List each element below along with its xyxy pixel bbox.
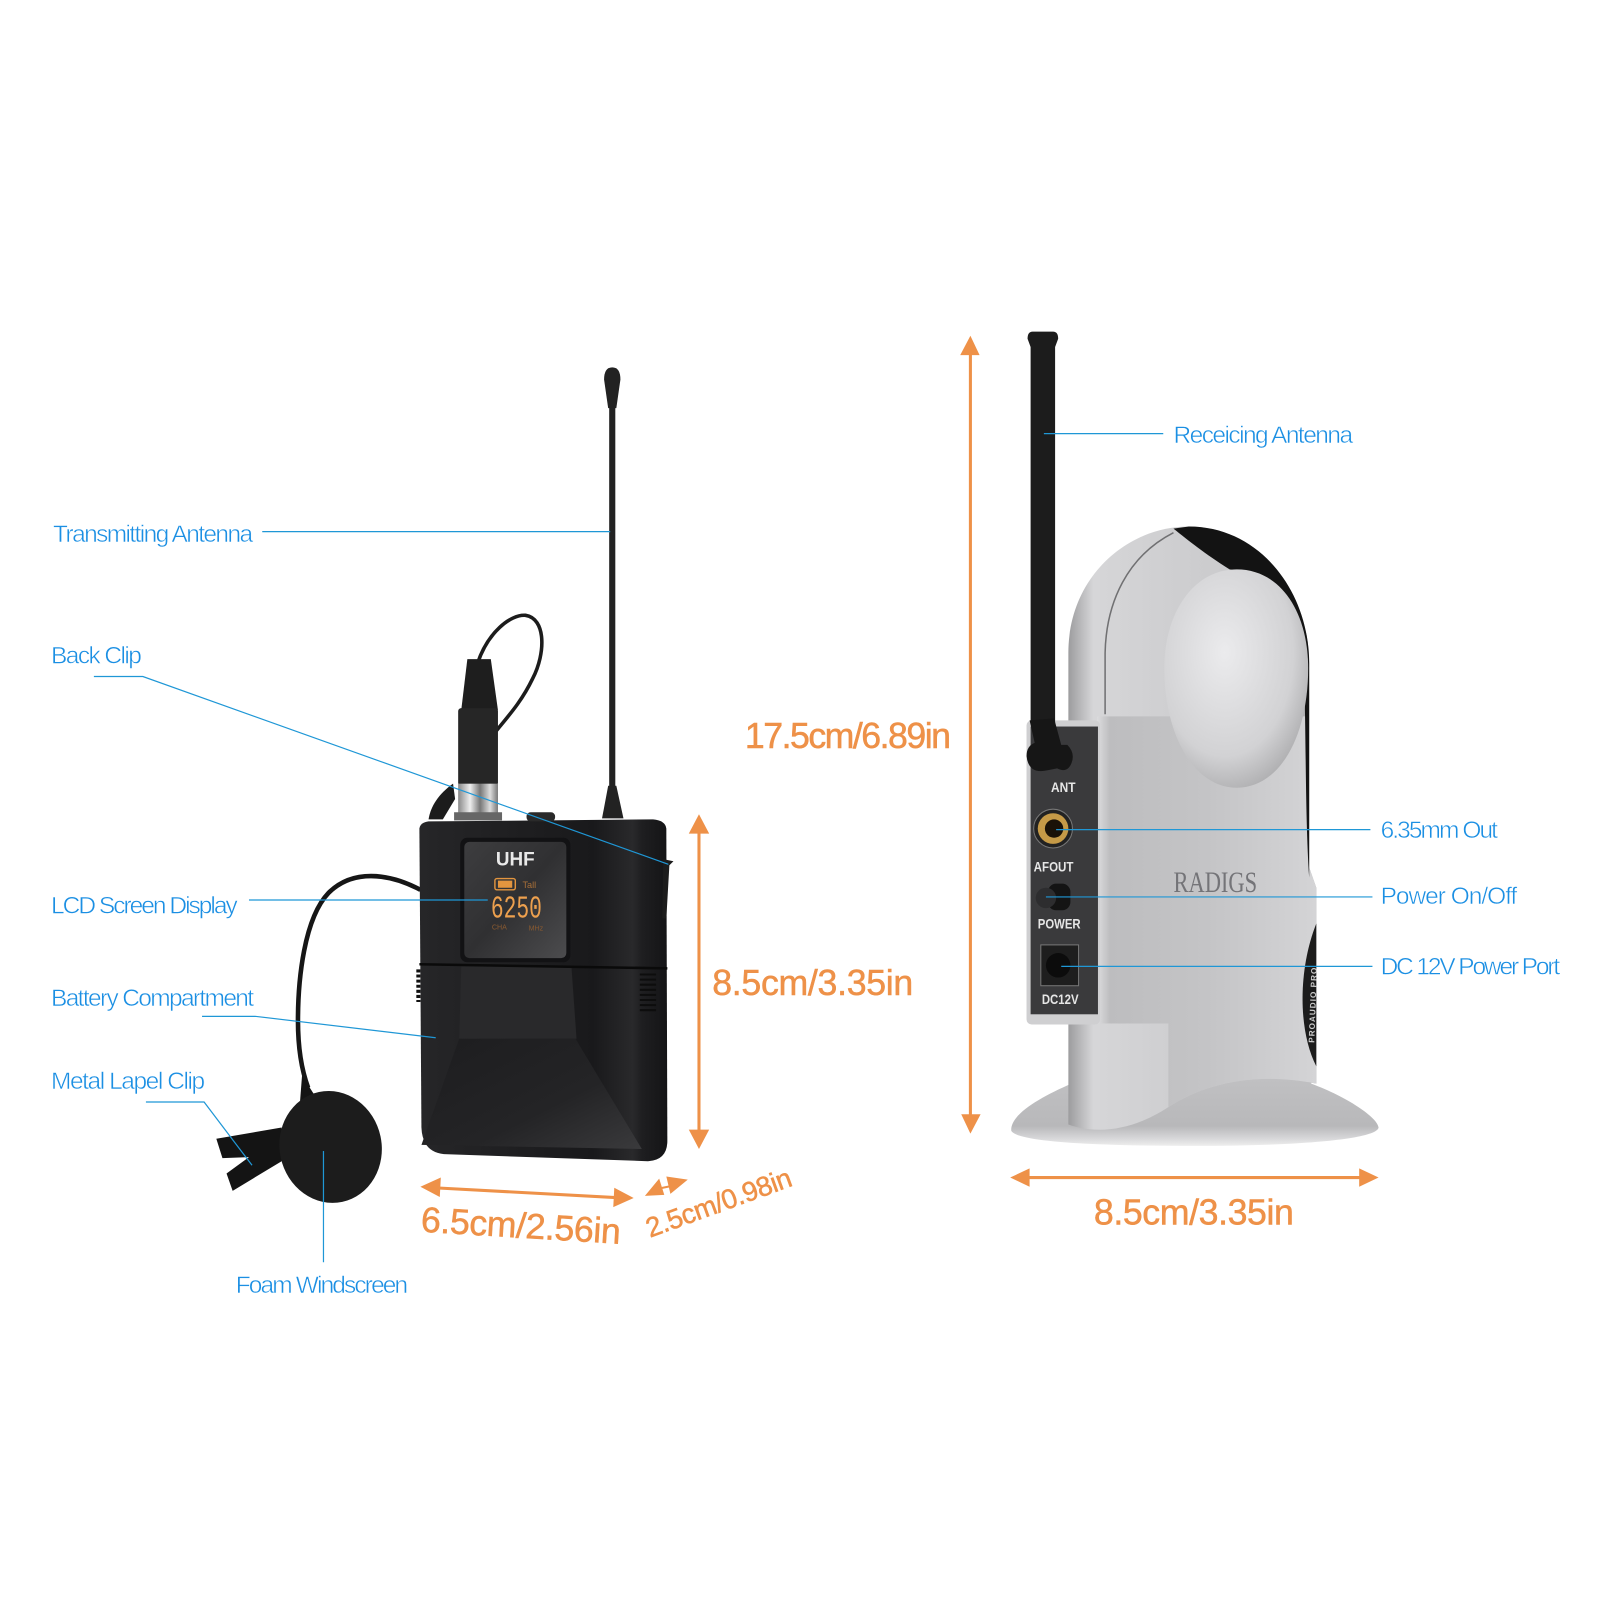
callout: Battery Compartment	[51, 985, 436, 1038]
callout: Back Clip	[51, 642, 668, 864]
back clip	[662, 859, 673, 918]
control panel: ANT	[1051, 780, 1076, 796]
dimension arrow: receiver width	[1010, 1168, 1379, 1187]
front face	[1097, 716, 1316, 1107]
receiving antenna	[1027, 332, 1073, 771]
LCD screen display: Tall	[522, 880, 536, 890]
icon: microphone cable loop	[478, 615, 542, 733]
metal lapel clip	[216, 1128, 282, 1191]
receiver base	[1011, 1066, 1379, 1146]
dimension text: receiver width: 8.5cm/3.35in	[1094, 1192, 1294, 1232]
transmitter device	[298, 367, 673, 1161]
dimension arrow: transmitter depth	[645, 1177, 688, 1196]
control panel: DC12V	[1042, 992, 1079, 1008]
foam windscreen	[269, 1076, 392, 1212]
DC power port	[1041, 945, 1079, 986]
receiver device	[1011, 332, 1379, 1146]
callout: Metal Lapel Clip	[51, 1068, 252, 1165]
dark side print: PROAUDIO PRO	[1307, 967, 1319, 1043]
callout: Battery Compartment: Battery Compartment	[51, 985, 254, 1012]
callout: Transmitting Antenna: Transmitting Antenna	[53, 521, 253, 548]
control panel: POWER	[1038, 917, 1081, 933]
callout: DC 12V Power Port: DC 12V Power Port	[1381, 953, 1560, 980]
housing seam	[1105, 533, 1173, 714]
dark side print	[1303, 923, 1319, 1066]
control panel	[1027, 720, 1100, 1024]
callout: LCD Screen Display: LCD Screen Display	[51, 892, 239, 919]
dimension text: transmitter width: 6.5cm/2.56in	[420, 1200, 622, 1252]
LCD screen display: 6250	[491, 892, 542, 927]
dark top band	[1173, 527, 1309, 878]
icon: lower cable to microphone	[298, 876, 420, 1088]
dimension arrow: receiver height	[960, 336, 981, 1134]
control panel: AFOUT	[1034, 859, 1074, 875]
dimension arrow: transmitter height	[689, 814, 709, 1149]
callout: Back Clip: Back Clip	[51, 642, 142, 669]
lapel microphone	[216, 1076, 392, 1212]
LCD screen display: UHF	[496, 848, 535, 870]
callout: Power On/Off: Power On/Off	[1381, 883, 1518, 910]
icon: transmitting antenna	[602, 367, 623, 818]
dimension arrow: transmitter width	[420, 1178, 634, 1207]
speaker dome	[1164, 569, 1308, 788]
6.35mm jack	[1034, 809, 1072, 848]
receiver housing	[1068, 527, 1316, 1130]
callout: Receicing Antenna: Receicing Antenna	[1173, 422, 1353, 449]
LCD screen display: MHz	[529, 925, 544, 933]
LCD screen display	[460, 838, 570, 962]
dimension text: transmitter height: 8.5cm/3.35in	[712, 963, 913, 1003]
callout: Metal Lapel Clip: Metal Lapel Clip	[51, 1068, 205, 1095]
power button	[1036, 884, 1070, 910]
brand logo: RADIGS	[1173, 867, 1257, 899]
callout: Foam Windscreen: Foam Windscreen	[236, 1272, 408, 1299]
LCD screen display: CHA	[492, 924, 507, 932]
dimension text: transmitter depth: 2.5cm/0.98in	[641, 1162, 796, 1243]
transmitter body	[419, 819, 667, 1161]
battery compartment	[418, 964, 667, 1149]
dimension text: receiver height: 17.5cm/6.89in	[745, 716, 951, 756]
callout: 6.35mm Out: 6.35mm Out	[1381, 817, 1498, 844]
icon: cable connector	[429, 659, 502, 820]
